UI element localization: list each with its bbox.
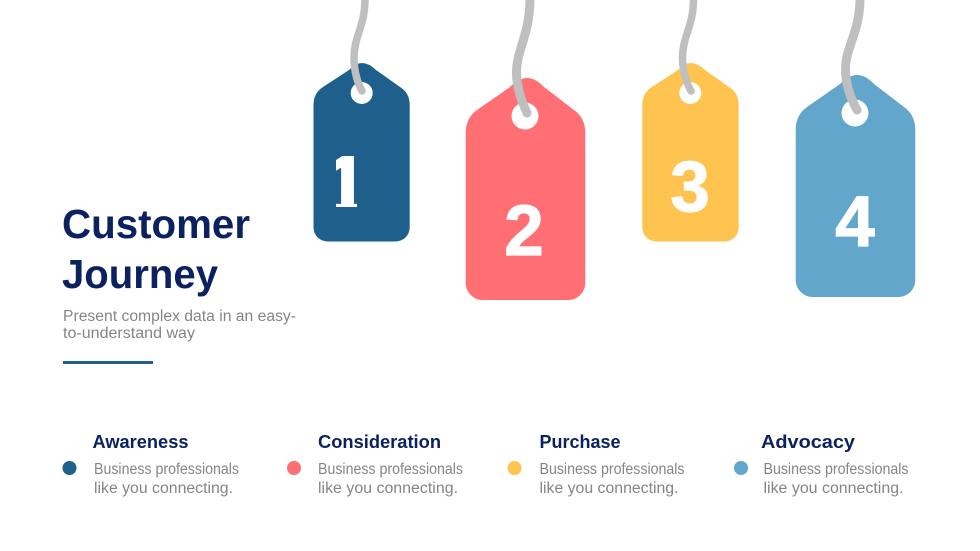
advocacy text: Business professionals bbox=[764, 461, 909, 478]
awareness text: Business professionals bbox=[94, 461, 239, 478]
tag 3 bbox=[642, 0, 739, 242]
number 1: 1 bbox=[323, 140, 368, 231]
advocacy dot bbox=[734, 461, 748, 475]
legend: purchase bbox=[508, 432, 685, 497]
title bbox=[62, 201, 250, 297]
legend: consideration bbox=[287, 432, 463, 497]
purchase text bbox=[540, 461, 685, 497]
subtitle: Present complex data in an easy- bbox=[63, 308, 296, 325]
tag 1 bbox=[314, 0, 410, 242]
tag 4 string bbox=[846, 0, 860, 110]
legend: awareness bbox=[62, 432, 239, 497]
tag 2 hole bbox=[512, 102, 538, 130]
advocacy text bbox=[764, 461, 909, 497]
advocacy text: like you connecting. bbox=[764, 480, 904, 497]
tag 3 body bbox=[642, 63, 739, 242]
subtitle: to-understand way bbox=[63, 325, 195, 342]
consideration text: like you connecting. bbox=[318, 480, 458, 497]
purchase heading: Purchase bbox=[540, 432, 620, 452]
awareness text bbox=[94, 461, 239, 497]
advocacy heading: Advocacy bbox=[761, 432, 855, 452]
purchase text: Business professionals bbox=[540, 461, 685, 478]
title: Customer bbox=[62, 201, 250, 247]
awareness heading: Awareness bbox=[92, 432, 188, 452]
awareness dot bbox=[62, 461, 76, 475]
consideration heading: Consideration bbox=[318, 432, 441, 452]
tag 1 string bbox=[354, 0, 365, 91]
purchase text: like you connecting. bbox=[540, 480, 678, 497]
number 2: 2 bbox=[504, 192, 544, 271]
tag 4 hole bbox=[842, 100, 868, 126]
legend: advocacy bbox=[734, 432, 909, 497]
awareness text: like you connecting. bbox=[94, 480, 233, 497]
tag 2 string bbox=[516, 0, 530, 113]
tag 1 body bbox=[314, 63, 410, 242]
subtitle bbox=[63, 308, 296, 342]
consideration dot bbox=[287, 461, 301, 475]
tag 4 bbox=[796, 0, 915, 297]
title underline bbox=[63, 361, 153, 364]
number 3: 3 bbox=[670, 148, 710, 227]
tag 1 hole bbox=[351, 82, 373, 104]
consideration text bbox=[318, 461, 463, 497]
tag 3 hole bbox=[679, 82, 701, 104]
number 4: 4 bbox=[835, 183, 875, 262]
tag 2 bbox=[466, 0, 585, 300]
title: Journey bbox=[62, 251, 218, 297]
tag 3 string bbox=[682, 0, 694, 91]
consideration text: Business professionals bbox=[318, 461, 463, 478]
tag 4 body bbox=[796, 75, 915, 297]
tag 2 body bbox=[466, 78, 585, 300]
purchase dot bbox=[508, 461, 522, 475]
